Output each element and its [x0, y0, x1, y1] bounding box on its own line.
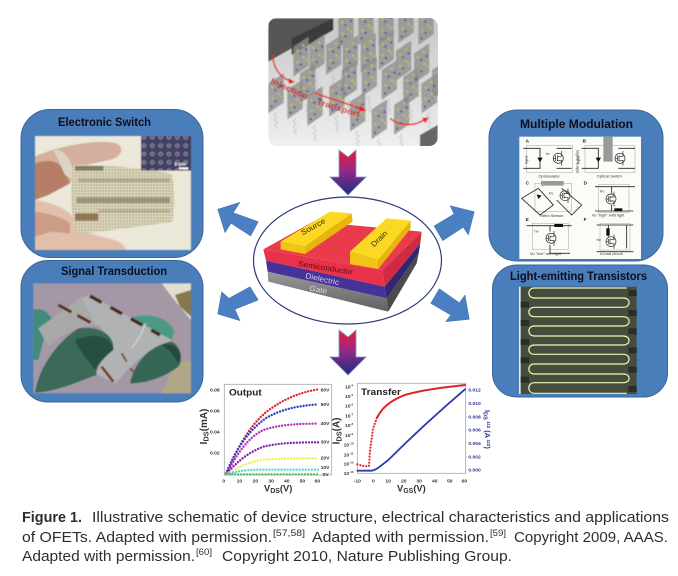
arrow: to signal transduction — [218, 287, 258, 321]
chart: transfer characteristics: -7 — [351, 413, 354, 417]
chart: transfer characteristics: DS — [334, 431, 343, 442]
chart: transfer characteristics: 10 — [345, 394, 351, 400]
chart: output characteristics: I — [199, 442, 210, 444]
chart: transfer characteristics: -5 — [351, 393, 354, 397]
chart: output characteristics: 20 — [253, 478, 258, 484]
heading: Electronic Switch — [58, 117, 151, 129]
chart: transfer characteristics: I — [332, 442, 343, 444]
panel: molecular injection and transport image — [268, 18, 438, 146]
caption — [22, 510, 669, 565]
chart: transfer characteristics: 50 — [447, 478, 453, 484]
chart: transfer characteristics: (A) — [332, 417, 343, 431]
diagram: six optoelectronic circuits: Vo "high" with light — [592, 213, 625, 218]
panel: light-emitting transistors — [492, 265, 668, 397]
transfer curves — [357, 385, 465, 471]
diagram: six optoelectronic circuits: hν — [597, 237, 601, 242]
caption line 2: Copyright 2009, AAAS. — [514, 530, 668, 546]
chart: output characteristics: (V) — [280, 483, 292, 493]
chart: transfer characteristics: 10 — [345, 414, 351, 420]
caption line 2 — [22, 528, 668, 546]
arrow: to multiple modulation — [434, 206, 474, 241]
chart: output characteristics: (mA) — [199, 409, 210, 431]
chart: transfer characteristics: -12 — [349, 461, 354, 465]
chart: output characteristics: 20V — [321, 456, 330, 462]
caption line 3: [60] — [196, 547, 212, 557]
chart: output characteristics: 50 — [300, 478, 305, 484]
chart: transfer characteristics: V — [397, 483, 403, 493]
layer: dielectric — [266, 243, 420, 298]
chart: output characteristics: 0.06 — [210, 408, 220, 414]
chart: output characteristics: 0.04 — [210, 430, 220, 436]
diagram: six optoelectronic circuits: Retro Sensor — [540, 213, 564, 218]
diagram: six optoelectronic circuits: Input — [575, 155, 580, 164]
chart: transfer characteristics: 1/2 — [485, 420, 491, 428]
chart: transfer characteristics: 0.000 — [468, 468, 481, 474]
layer: gate — [268, 253, 419, 312]
chart: transfer characteristics: 0.004 — [468, 441, 481, 447]
chart: transfer characteristics: -10 — [354, 478, 361, 484]
photo: flexible OFET array held in fingers — [35, 136, 191, 250]
chart: transfer characteristics: ) — [483, 446, 492, 449]
chart: output characteristics: 60 — [315, 478, 320, 484]
chart: output characteristics: DS — [270, 488, 280, 495]
layer: gate: Gate — [309, 284, 328, 296]
chart: transfer characteristics: 20 — [401, 478, 407, 484]
chart: transfer characteristics: GS — [403, 488, 414, 495]
arrow: top gradient arrow to device — [330, 150, 366, 195]
chart: transfer characteristics: (V) — [413, 483, 426, 493]
diagram: six optoelectronic circuits: hν — [600, 188, 604, 193]
panel: molecular injection and transport image: Injection — [269, 75, 310, 101]
chart: transfer characteristics: 40 — [432, 478, 438, 484]
chart: transfer characteristics: 1/2 — [485, 438, 491, 447]
chart: transfer characteristics — [332, 383, 492, 495]
photo: serpentine light emission — [519, 287, 637, 394]
chart: output characteristics: V — [264, 483, 270, 493]
chart: transfer characteristics: 0.008 — [468, 414, 481, 420]
chart: transfer characteristics: -11 — [349, 451, 354, 455]
chart: transfer characteristics: 60 — [462, 478, 467, 484]
chart: transfer characteristics: 10 — [385, 478, 391, 484]
diagram: six optoelectronic circuits: C — [526, 180, 530, 185]
chart: transfer characteristics: 0.012 — [468, 388, 481, 394]
chart: output characteristics: 10 — [237, 478, 242, 484]
diagram: six optoelectronic circuits: F — [584, 217, 587, 222]
caption line 2: of OFETs. Adapted with permission. — [22, 530, 272, 546]
electrode: source: Source — [299, 216, 327, 237]
diagram: six optoelectronic circuits: Optical Switch — [597, 174, 622, 179]
chart: transfer characteristics: 0.006 — [468, 428, 481, 434]
chart: transfer characteristics: 10 — [345, 433, 351, 439]
diagram: six optoelectronic circuits: D — [584, 180, 588, 185]
panel: molecular injection and transport image: Transport — [315, 96, 362, 119]
chart: output characteristics: 30V — [321, 440, 330, 446]
heading: Multiple Modulation — [520, 117, 633, 131]
chart: output characteristics: DS — [202, 431, 211, 442]
heading: Light-emitting Transistors — [510, 271, 647, 283]
diagram: six optoelectronic circuits: B — [583, 138, 587, 143]
chart: transfer characteristics: -4 — [351, 384, 354, 388]
chart: transfer characteristics: -9 — [351, 432, 354, 436]
chart: transfer characteristics: 10 — [345, 423, 351, 429]
chart: transfer characteristics: DS — [482, 412, 488, 420]
panel: electronic switch — [21, 110, 203, 258]
caption line 1: Illustrative schematic of device structure, electrical characteristics and applications — [92, 510, 669, 526]
chart: transfer characteristics: 30 — [416, 478, 422, 484]
diagram: six optoelectronic circuits: Signal output — [576, 150, 581, 174]
caption line 2: [57,58] — [273, 528, 305, 538]
diagram: six optoelectronic circuits: A — [526, 138, 530, 143]
caption line 3: Copyright 2010, Nature Publishing Group. — [222, 549, 512, 565]
caption line 3: Adapted with permission. — [22, 549, 195, 565]
diagram: six optoelectronic circuits: hν — [546, 151, 550, 156]
chart: output characteristics: 0.08 — [210, 387, 220, 393]
layer: dielectric: Dielectric — [305, 271, 340, 287]
electrode: drain: Drain — [369, 229, 389, 249]
diagram: six optoelectronic circuits: Vo "low" with light — [530, 251, 562, 256]
chart: transfer characteristics: 10 — [344, 462, 349, 468]
diagram: six optoelectronic circuits: A load circuit — [600, 251, 623, 256]
chart: transfer characteristics: -13 — [349, 470, 354, 474]
ellipse: device outline — [254, 197, 442, 324]
chart: output characteristics: 50V — [321, 402, 330, 408]
chart: output characteristics: Output — [229, 388, 262, 398]
output curves — [226, 389, 318, 474]
chart: transfer characteristics: -6 — [351, 403, 354, 407]
chart: output characteristics: 40V — [321, 421, 330, 427]
chart: transfer characteristics: 10 — [344, 442, 349, 448]
chart: transfer characteristics: Transfer — [361, 387, 401, 397]
panel: multiple modulation — [489, 110, 663, 261]
device structure: OFET layer stack — [263, 212, 422, 312]
electrode: drain — [350, 218, 411, 269]
chart: transfer characteristics: 0 — [372, 478, 375, 484]
diagram: six optoelectronic circuits: E — [526, 217, 529, 222]
photo: flexible OFET array held in fingers: 2 μm — [174, 161, 187, 167]
chart: output characteristics — [199, 384, 332, 495]
arrow: device to output charts — [330, 330, 366, 375]
chart: transfer characteristics: 0.010 — [468, 401, 481, 407]
diagram: six optoelectronic circuits: hν — [549, 190, 553, 195]
chart: transfer characteristics: 10 — [345, 385, 351, 391]
caption line 3 — [22, 547, 512, 565]
arrow: to light-emitting transistors — [431, 289, 469, 322]
chart: output characteristics: 30 — [268, 478, 274, 484]
chart: transfer characteristics: 0.002 — [468, 454, 481, 460]
electrode: source — [281, 212, 353, 254]
caption line 2: Adapted with permission. — [312, 530, 489, 546]
photo: flexible film held in gloves — [33, 283, 191, 393]
chart: output characteristics: 0 — [222, 478, 225, 484]
chart: transfer characteristics: 10 — [345, 404, 351, 410]
chart: output characteristics: 60V — [321, 388, 330, 394]
chart: output characteristics: 10V — [321, 465, 330, 471]
layer: semiconductor — [263, 222, 422, 287]
chart: output characteristics: 0.02 — [210, 450, 220, 456]
diagram: six optoelectronic circuits: hν — [534, 228, 539, 233]
caption line 2: [59] — [490, 528, 506, 538]
heading: Signal Transduction — [61, 266, 167, 278]
chart: transfer characteristics: 10 — [344, 471, 349, 477]
caption line 1: Figure 1. — [22, 510, 82, 526]
chart: transfer characteristics: (A — [483, 428, 492, 439]
arrow: to electronic switch — [218, 202, 258, 236]
chart: transfer characteristics: I — [483, 410, 492, 412]
panel: signal transduction — [21, 260, 203, 402]
diagram: six optoelectronic circuits — [519, 137, 641, 259]
chart: transfer characteristics: 10 — [344, 452, 349, 458]
chart: output characteristics: 0V — [323, 472, 329, 478]
diagram: six optoelectronic circuits: Input — [523, 155, 528, 164]
layer: semiconductor: Semiconductor — [298, 259, 354, 277]
chart: output characteristics: 40 — [284, 478, 290, 484]
diagram: six optoelectronic circuits: Optoisolator — [538, 174, 560, 179]
chart: transfer characteristics: -8 — [351, 422, 354, 426]
chart: transfer characteristics: -10 — [349, 441, 354, 445]
